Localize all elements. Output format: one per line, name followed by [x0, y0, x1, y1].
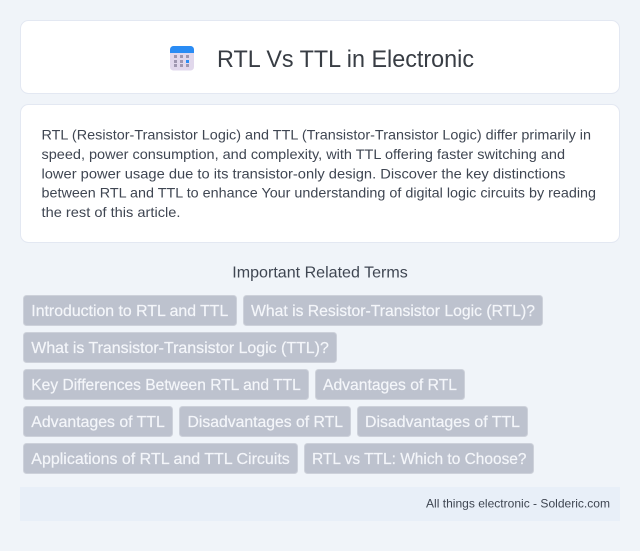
intro paragraph [42, 126, 596, 220]
chip: what is TTL [24, 332, 336, 362]
panel: title card [20, 20, 620, 94]
chip: applications: Applications of RTL and TTL Circuits [31, 451, 290, 468]
intro paragraph: lower power usage due to its transistor-only design. Discover the key distinctions [42, 166, 566, 182]
footer credit: All things electronic - Solderic.com [426, 496, 610, 510]
intro paragraph: the rest of this article. [42, 204, 180, 220]
panel: introduction [20, 104, 620, 242]
chip: what is RTL: What is Resistor-Transistor Logic (RTL)? [251, 303, 535, 320]
chip: key differences: Key Differences Between RTL and TTL [31, 377, 301, 394]
chip: disadvantages of RTL: Disadvantages of RTL [188, 414, 343, 431]
chip: which to choose [304, 444, 534, 474]
chip: which to choose: RTL vs TTL: Which to Choose? [312, 451, 527, 468]
chip: introduction [24, 296, 236, 326]
chip: advantages of TTL: Advantages of TTL [31, 414, 165, 431]
intro paragraph: between RTL and TTL to enhance Your understanding of digital logic circuits by reading [42, 184, 596, 200]
heading: important related terms: Important Related Terms [232, 265, 408, 282]
title: RTL Vs TTL in Electronic [217, 46, 474, 73]
chip: disadvantages of TTL [358, 406, 528, 436]
chip: advantages of TTL [24, 406, 172, 436]
chip: advantages of RTL: Advantages of RTL [323, 377, 457, 394]
icon: calendar [170, 46, 194, 70]
intro paragraph: speed, power consumption, and complexity, with TTL offering faster switching and [42, 146, 565, 162]
chip: applications [24, 444, 298, 474]
chip: key differences [24, 370, 308, 400]
footer [20, 487, 620, 521]
panel: related term chips [24, 296, 542, 474]
chip: disadvantages of TTL: Disadvantages of TTL [365, 414, 520, 431]
chip: introduction: Introduction to RTL and TTL [31, 303, 228, 320]
chip: what is TTL: What is Transistor-Transistor Logic (TTL)? [31, 340, 329, 357]
chip: disadvantages of RTL [180, 406, 350, 436]
chip: advantages of RTL [316, 370, 464, 400]
chip: what is RTL [244, 296, 542, 326]
intro paragraph: RTL (Resistor-Transistor Logic) and TTL (Transistor-Transistor Logic) differ primarily in [42, 126, 591, 142]
